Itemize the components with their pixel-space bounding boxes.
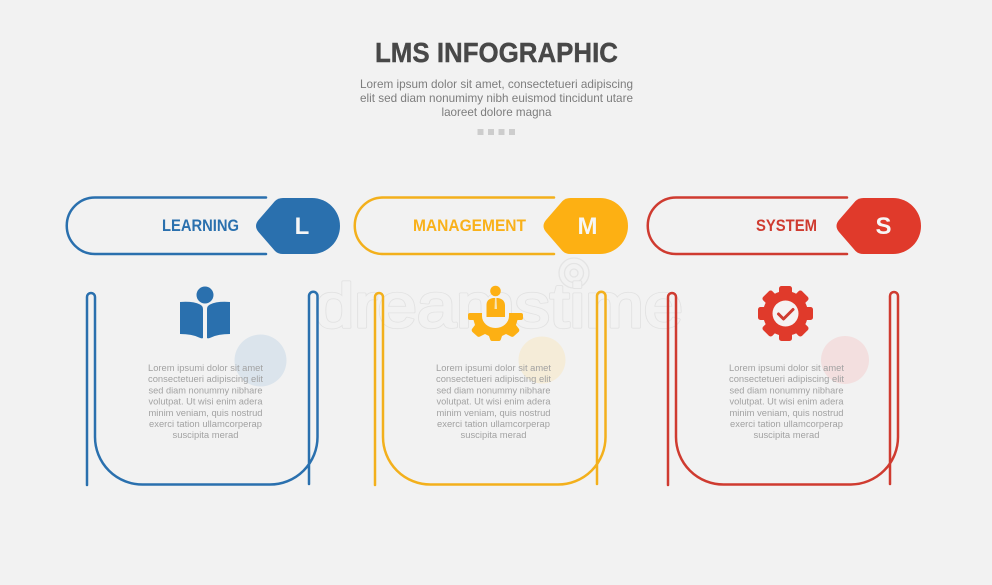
panel: management (355, 198, 628, 485)
pill outline (648, 198, 847, 254)
body text: minim veniam, quis nostrud (730, 408, 844, 419)
body frame (375, 292, 606, 485)
decorative circle (821, 336, 869, 384)
body text: consectetueri adipiscing elit (148, 374, 263, 385)
icon: manager on gear (468, 286, 523, 341)
body text: suscipita merad (460, 430, 526, 441)
label: learning: LEARNING (162, 217, 239, 235)
body text: volutpat. Ut wisi enim adera (148, 396, 263, 408)
gear centre (772, 300, 798, 326)
decorative circle (234, 334, 286, 386)
watermark: dreamstime (315, 272, 683, 341)
body text (436, 363, 551, 441)
gear (758, 286, 813, 341)
subtitle text block: laoreet dolore magna (442, 105, 552, 119)
body text: sed diam nonummy nibhare (730, 386, 844, 396)
tie (494, 298, 497, 309)
body text: consectetueri adipiscing elit (436, 374, 551, 385)
body text: minim veniam, quis nostrud (436, 408, 550, 419)
half gear (468, 313, 523, 341)
body text: minim veniam, quis nostrud (148, 408, 262, 419)
title pagination dots (478, 129, 515, 135)
body frame (87, 292, 318, 485)
body frame (668, 292, 898, 485)
body text: volutpat. Ut wisi enim adera (436, 396, 551, 408)
panel: learning (67, 198, 340, 485)
body text: exerci tation ullamcorperap (149, 419, 262, 430)
pill outline (67, 198, 266, 254)
body text: exerci tation ullamcorperap (730, 419, 843, 430)
body text: volutpat. Ut wisi enim adera (730, 396, 844, 408)
pill outline (355, 198, 554, 254)
body text: Lorem ipsumi dolor sit amet (436, 363, 551, 374)
letter badge: M (578, 213, 598, 240)
letter badge: S (875, 213, 892, 240)
decorative circle (518, 336, 566, 384)
watermark: dreamstime (315, 272, 683, 341)
subtitle text block: Lorem ipsum dolor sit amet, consectetueri adipiscing (360, 77, 633, 91)
check mark (778, 310, 793, 319)
icon: reading book (180, 286, 230, 338)
body text: Lorem ipsumi dolor sit amet (729, 363, 844, 374)
body text (148, 363, 263, 441)
body text: suscipita merad (754, 430, 820, 441)
subtitle text block: elit sed diam nonumimy nibh euismod tincidunt utare (360, 91, 633, 105)
header: management (355, 198, 628, 254)
person body (486, 298, 505, 317)
body text: consectetueri adipiscing elit (729, 374, 844, 385)
body text (729, 363, 844, 441)
label: management: MANAGEMENT (413, 217, 526, 235)
header: system (648, 198, 921, 254)
letter badge (836, 198, 921, 254)
icon: gear with check (758, 286, 813, 341)
header: learning (67, 198, 340, 254)
body text: exerci tation ullamcorperap (437, 419, 550, 430)
body text: Lorem ipsumi dolor sit amet (148, 363, 263, 374)
body text: sed diam nonummy nibhare (436, 386, 550, 396)
body text: suscipita merad (172, 430, 238, 441)
letter badge: L (295, 213, 309, 240)
panel: system (648, 198, 921, 485)
letter badge (544, 198, 628, 254)
letter badge (256, 198, 340, 254)
person head (490, 286, 501, 296)
subtitle text block (360, 77, 633, 119)
title: LMS INFOGRAPHIC (375, 37, 618, 68)
gear hollow (482, 313, 509, 328)
label: system: SYSTEM (756, 217, 817, 235)
body text: sed diam nonummy nibhare (148, 386, 262, 396)
